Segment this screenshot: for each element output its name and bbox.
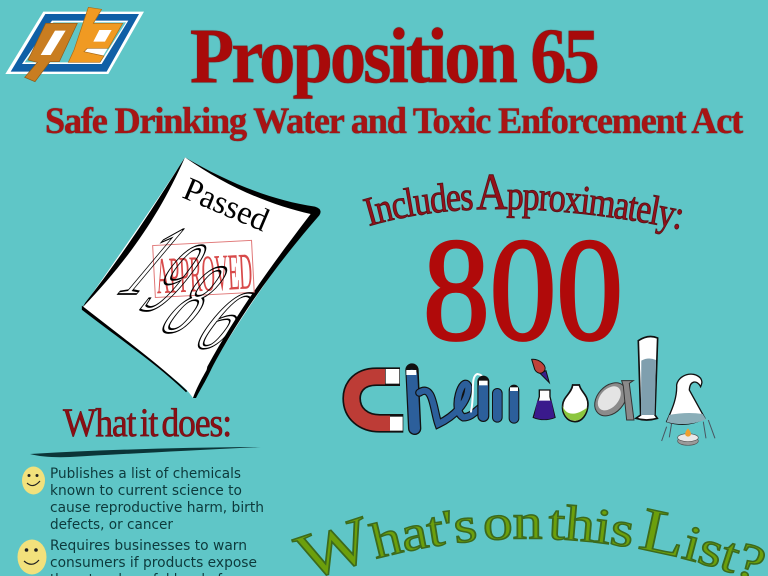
handwritten year 1986: 9 xyxy=(119,223,233,332)
test tubes h e m xyxy=(411,370,514,428)
bullet 1 xyxy=(22,466,264,533)
bullet text 1: defects, or cancer xyxy=(50,517,173,533)
smiley icon 2 xyxy=(18,540,46,574)
heading: includes approximately: Includes Approximately: xyxy=(362,174,682,234)
logo: PLE xyxy=(5,7,144,82)
title: Proposition 65 xyxy=(190,12,598,99)
bullet text 1: Publishes a list of chemicals xyxy=(50,466,241,482)
flask on burner xyxy=(667,374,705,424)
smiley icon 1 xyxy=(22,466,45,494)
handwritten year 1986: 1 xyxy=(95,208,212,316)
bullet text 2 xyxy=(50,538,257,576)
handwritten year 1986: 6 xyxy=(174,274,277,366)
illustrated word: Chemicals xyxy=(352,336,715,445)
approved stamp xyxy=(153,240,255,305)
heading underline stroke xyxy=(30,447,261,457)
handwritten year 1986: 8 xyxy=(138,246,253,354)
bullet text 2: consumers if products expose xyxy=(50,555,257,571)
purple flask xyxy=(533,390,555,419)
magnet C xyxy=(352,376,403,424)
green flask xyxy=(563,385,588,422)
figure: 800: 800 xyxy=(423,208,623,371)
graduated cylinder xyxy=(636,336,658,420)
illustration: approved paper, passed 1986 xyxy=(83,157,321,398)
dropper xyxy=(532,359,549,383)
bullet text 1: cause reproductive harm, birth xyxy=(50,500,264,516)
handwritten year 1986 xyxy=(95,208,277,366)
subtitle: Safe Drinking Water and Toxic Enforcement Act xyxy=(45,101,744,142)
heading: what it does: What it does: xyxy=(63,400,231,445)
bullet 2 xyxy=(18,538,257,576)
illustration: approved paper, passed 1986: APPROVED xyxy=(155,243,254,305)
bullet text 2: Requires businesses to warn xyxy=(50,538,247,554)
mortar and pestle xyxy=(588,377,633,422)
bullet text 1: known to current science to xyxy=(50,483,242,499)
passed label: Passed xyxy=(178,171,274,239)
bullet text 1 xyxy=(50,466,264,533)
